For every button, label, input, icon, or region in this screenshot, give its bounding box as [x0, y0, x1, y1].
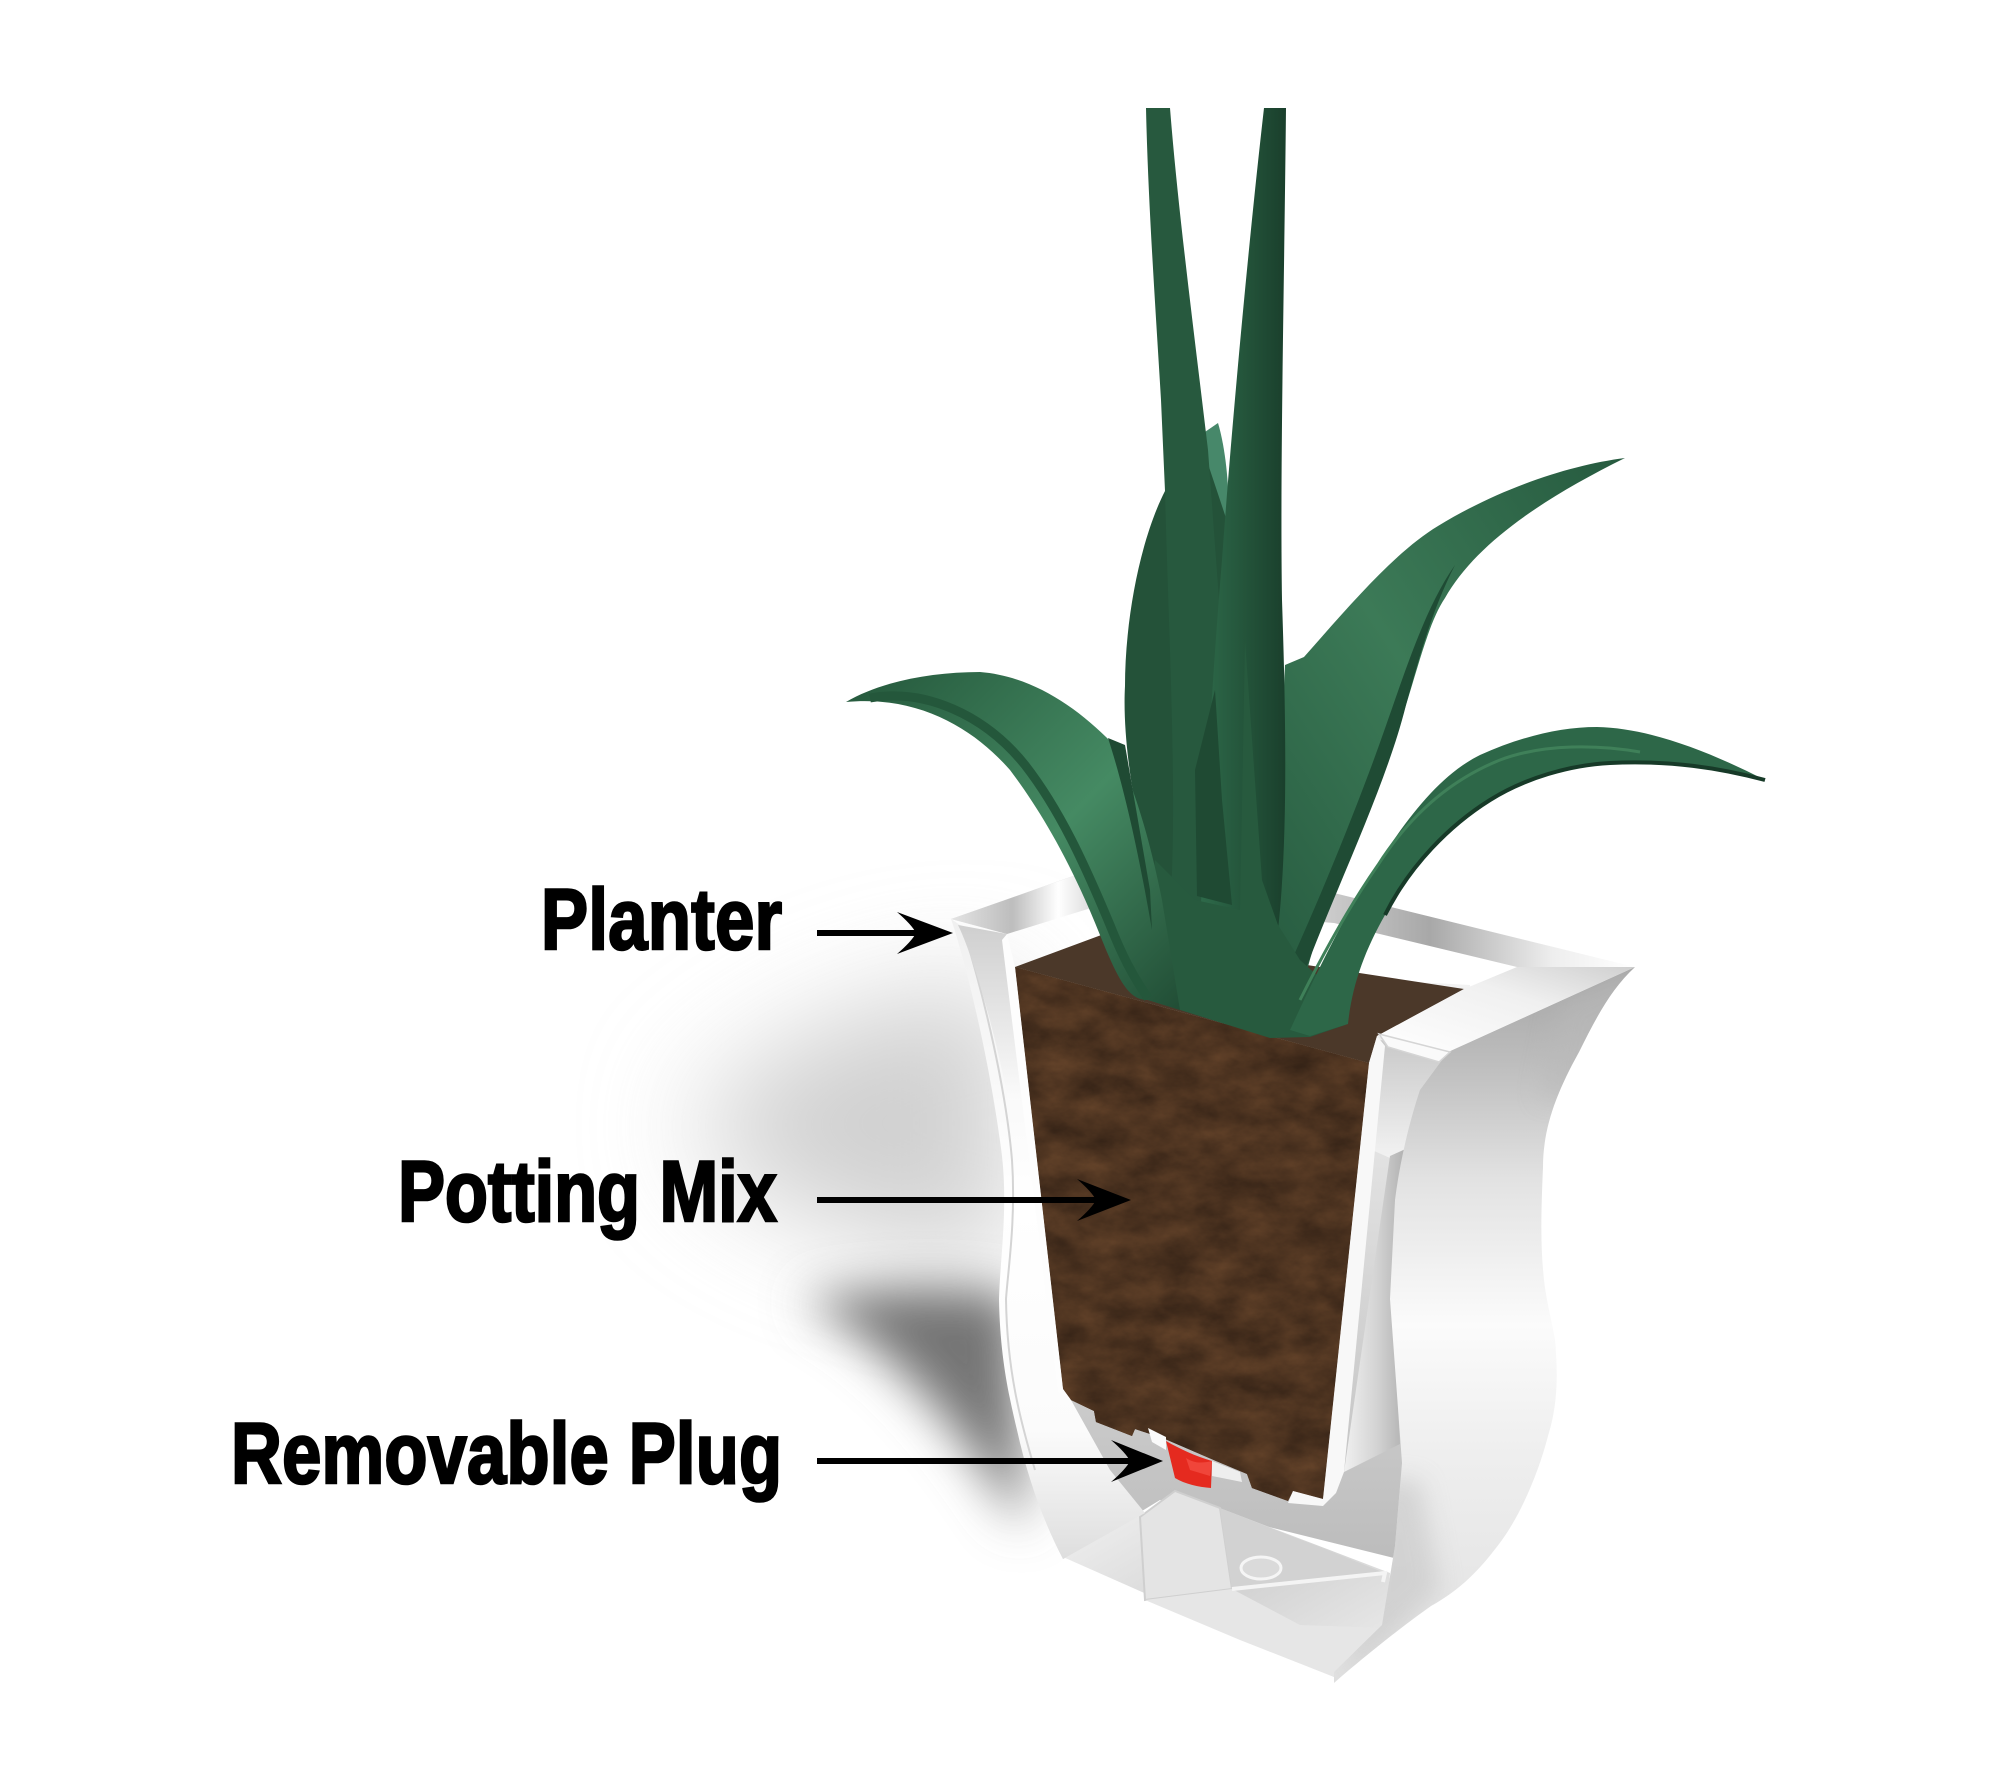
right rim of planter: [1377, 967, 1635, 1052]
label: Removable Plug: Removable Plug: [231, 1405, 782, 1502]
inner liner left band: [1002, 934, 1071, 1400]
back rim of planter: [951, 876, 1635, 967]
inner liner right band: [1288, 1036, 1385, 1506]
soil top surface: [1015, 934, 1464, 1063]
low right leaf highlight: [1300, 747, 1640, 1000]
left rim of planter: [951, 872, 1104, 934]
plant: [846, 108, 1765, 1038]
right inner panel: [1344, 1146, 1412, 1472]
broad dark centre leaf: [1125, 440, 1240, 900]
soil body: [1015, 967, 1369, 1501]
left leaf lower dark band: [870, 696, 1148, 998]
planter: [951, 872, 1640, 1690]
label: Planter: Planter: [541, 871, 782, 968]
planter cutaway infographic: [234, 108, 1766, 1683]
reservoir floor: [1063, 1491, 1390, 1677]
right wall of planter: [1330, 960, 1640, 1690]
centre stem: [1148, 640, 1345, 1038]
low right leaf shadow edge: [1385, 762, 1765, 915]
arrow: Removable Plug: [817, 1440, 1163, 1482]
right lip fill behind liner: [1372, 1040, 1448, 1158]
tall right leaf: [1200, 108, 1286, 930]
arrow: Potting Mix: [817, 1179, 1131, 1221]
label: Potting Mix: Potting Mix: [398, 1143, 777, 1240]
back centre leaf: [1200, 423, 1229, 640]
dark ground shadow, lower: [800, 1288, 1025, 1530]
tall left leaf: [1146, 108, 1228, 930]
left wall inner line: [965, 935, 1035, 1470]
interior back wall: [1020, 960, 1470, 1560]
centre dark groove: [1195, 690, 1232, 905]
left leaf inner fold: [1108, 738, 1152, 930]
upward right leaf: [1270, 458, 1625, 1000]
left wall of planter: [951, 919, 1145, 1559]
left wall section lip: [958, 925, 1022, 1100]
arrow: Planter: [817, 912, 953, 954]
right wall section lip: [1379, 1034, 1450, 1062]
dark fold of right leaf: [1285, 565, 1455, 990]
soft wall shadow, upper: [690, 985, 1010, 1270]
left droopy leaf: [846, 672, 1180, 1010]
low right leaf: [1290, 727, 1765, 1036]
removable plug: [1148, 1428, 1242, 1488]
